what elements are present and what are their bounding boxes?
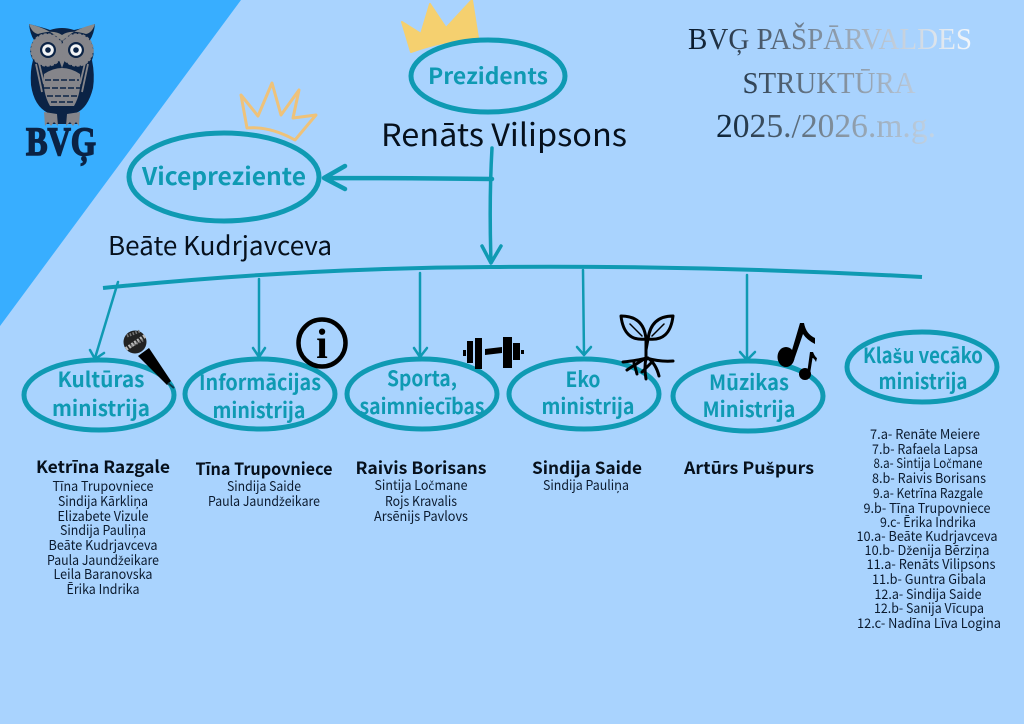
panel: Klašu vecāko ministry — [847, 332, 997, 402]
text block: class elders list: 10.a- Beāte Kudrjavceva — [856, 525, 998, 545]
panel: Eko ministry — [509, 359, 659, 429]
icon: plant with roots — [621, 316, 673, 379]
arrow: Mūzikas — [740, 275, 755, 360]
text block: class elders list: 12.c- Nadīna Līva Logina — [857, 612, 1001, 632]
text block: Sporta members: Rojs Kravalis — [385, 490, 457, 510]
icon: info: i — [316, 322, 328, 368]
president ellipse — [411, 40, 565, 112]
panel: Mūzikas ministry: Mūzikas — [709, 367, 789, 397]
title: 2025./2026.m.g. — [716, 108, 936, 145]
icon: small crown — [241, 83, 316, 140]
panel: Eko ministry: ministrija — [542, 391, 634, 421]
text block: Sporta members — [356, 454, 486, 525]
text block: Kultūras members: Elizabete Vizule — [58, 505, 148, 525]
panel: Informācijas ministry — [185, 359, 335, 429]
text block: Sporta members: Raivis Borisans — [356, 454, 486, 479]
panel: Sporta ministry: Sporta, — [387, 363, 457, 393]
arrow to vice president — [324, 166, 492, 189]
text block: Eko members — [532, 454, 642, 494]
panel: Mūzikas ministry: Ministrija — [702, 394, 796, 424]
icon: dumbbell — [463, 337, 524, 369]
text block: Sporta members: Sintija Ločmane — [374, 474, 468, 494]
text block: Eko members: Sindija Pauliņa — [543, 474, 629, 494]
text block: class elders list: 9.b- Tīna Trupovniece — [864, 497, 990, 517]
panel: Kultūras ministry — [24, 360, 174, 430]
icon: owl — [29, 24, 95, 126]
title — [688, 21, 972, 145]
corner triangle — [0, 0, 241, 326]
president name: Renāts Vilipsons — [381, 110, 627, 155]
text block: Sporta members: Arsēnijs Pavlovs — [374, 505, 468, 525]
text block: Kultūras members: Ērika Indrika — [66, 578, 140, 598]
vice president ellipse — [129, 133, 319, 221]
text block: Eko members: Sindija Saide — [532, 454, 642, 479]
text block: Kultūras members: Tīna Trupovniece — [52, 475, 154, 495]
branch line — [103, 267, 922, 288]
vice president name: Beāte Kudrjavceva — [108, 226, 332, 263]
text block: Kultūras members: Sindija Pauliņa — [60, 519, 146, 539]
arrow: Informācijas — [253, 279, 265, 357]
text block: class elders list: 10.b- Dženija Bērziņa — [864, 539, 990, 559]
text block: Informācijas members — [196, 455, 333, 510]
logo: BVG owl — [26, 24, 96, 165]
text block: Informācijas members: Tīna Trupovniece — [196, 455, 333, 480]
text block: class elders list: 12.a- Sindija Saide — [874, 583, 982, 603]
text block: class elders list: 11.a- Renāts Vilipsons — [866, 553, 996, 573]
text block: Kultūras members: Beāte Kudrjavceva — [48, 534, 158, 554]
text block: class elders list: 9.a- Ketrīna Razgale — [873, 482, 983, 502]
arrow: Kultūras — [90, 282, 118, 359]
panel: Mūzikas ministry — [673, 361, 823, 431]
president ellipse: Prezidents — [428, 59, 548, 91]
text block: class elders list: 8.a- Sintija Ločmane — [874, 452, 982, 472]
text block: Kultūras members: Paula Jaundžeikare — [47, 549, 159, 569]
vice president ellipse: Vicepreziente — [141, 157, 306, 192]
panel: Klašu vecāko ministry: ministrija — [878, 366, 968, 396]
panel: Eko ministry: Eko — [566, 364, 600, 394]
arrow: Eko — [577, 270, 591, 355]
panel: Informācijas ministry: Informācijas — [199, 367, 321, 397]
text block: class elders list: 12.b- Sanija Vīcupa — [874, 597, 984, 617]
panel: Kultūras ministry: ministrija — [52, 393, 150, 423]
text block: class elders list: 9.c- Ērika Indrika — [880, 511, 976, 531]
arrow from president to branch line — [482, 148, 501, 263]
text block: class elders list: 8.b- Raivis Borisans — [872, 467, 986, 487]
arrow: Sporta — [414, 273, 427, 357]
logo text: BVĢ — [26, 119, 96, 165]
text block: class elders list: 7.a- Renāte Meiere — [870, 423, 980, 443]
text block: class elders list — [856, 423, 1001, 632]
text block: Kultūras members: Leila Baranovska — [54, 563, 152, 583]
panel: Klašu vecāko ministry: Klašu vecāko — [863, 340, 983, 370]
panel: Informācijas ministry: ministrija — [212, 395, 306, 425]
text block: Kultūras members — [36, 453, 170, 598]
icon: microphone — [124, 330, 174, 388]
panel: Kultūras ministry: Kultūras — [58, 364, 144, 394]
text block: class elders list: 11.b- Guntra Gibala — [872, 568, 986, 588]
text block: Mūzikas head: Artūrs Pušpurs — [683, 454, 814, 479]
icon: music notes — [778, 323, 817, 380]
title: BVĢ PAŠPĀRVALDES — [688, 21, 972, 56]
icon: info — [298, 320, 346, 368]
text block: Informācijas members: Paula Jaundžeikare — [208, 490, 320, 510]
text block: Informācijas members: Sindija Saide — [227, 475, 301, 495]
icon: large crown — [402, 0, 478, 52]
text block: Kultūras members: Ketrīna Razgale — [36, 453, 170, 478]
title: STRUKTŪRA — [742, 65, 916, 100]
panel: Sporta ministry — [347, 359, 497, 429]
panel: Sporta ministry: saimniecības — [360, 391, 484, 421]
text block: class elders list: 7.b- Rafaela Lapsa — [872, 438, 978, 458]
text block: Kultūras members: Sindija Kārkliņa — [58, 490, 148, 510]
